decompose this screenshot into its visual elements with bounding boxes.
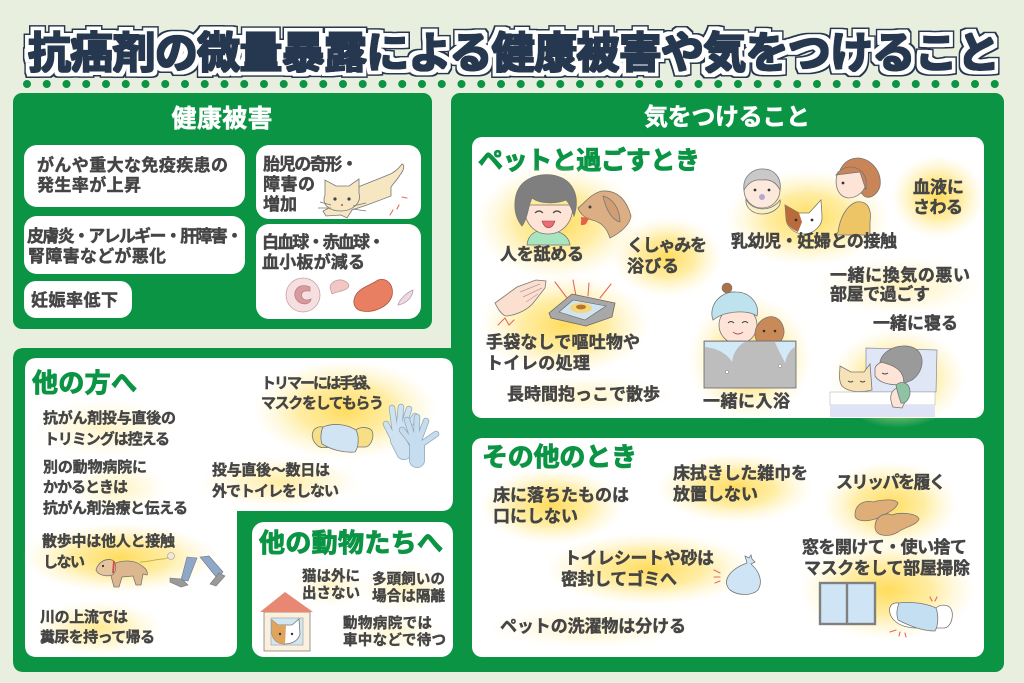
card: 胎児の奇形: 胎児の奇形・ (263, 155, 358, 174)
item: 長時間抱っこ (493, 375, 677, 415)
card: 妊娠率低下 (24, 281, 132, 318)
card: 胎児の奇形: 障害の (263, 174, 315, 194)
icon: baby, cat, pregnant woman (744, 158, 880, 235)
panel: 健康被害 (13, 93, 432, 329)
item: 手袋なしで処理 (480, 275, 650, 375)
heading: 健康被害: 健康被害 (172, 105, 272, 133)
heading: 他の動物たちへ: 他の動物たちへ (259, 528, 443, 558)
item: 猫は外に出さない (292, 564, 368, 608)
panel: 他の動物たちへ (252, 522, 453, 657)
card: 胎児の奇形 (256, 145, 421, 219)
item: 手袋なしで処理: トイレの処理 (486, 354, 590, 373)
item: 窓を開けてマスク: マスクをして部屋掃除 (804, 559, 970, 578)
item: ペットの洗濯物: ペットの洗濯物は分ける (500, 617, 686, 636)
item: 猫は外に出さない: 猫は外に (302, 567, 360, 585)
panel: 気をつけること (451, 93, 1004, 672)
icon: blood cells (286, 278, 413, 312)
item: 多頭飼い: 多頭飼いの (372, 570, 445, 588)
panel: その他のとき (472, 438, 984, 657)
item: 投与直後〜数日 (198, 456, 362, 508)
card: がんや重大な免疫疾患 (24, 145, 245, 207)
item: 換気の悪い部屋 (815, 256, 985, 316)
item: ペットの洗濯物 (485, 605, 695, 649)
card: 皮膚炎など: 腎障害などが悪化 (28, 246, 166, 266)
item: 乳幼児・妊婦 (726, 158, 897, 266)
item: 乳幼児・妊婦: 乳幼児・妊婦との接触 (731, 232, 897, 251)
item: トイレシートや砂: 密封してゴミへ (561, 569, 677, 589)
card: 血球: 血小板が減る (262, 252, 365, 272)
item: 投与直後〜数日: 外でトイレをしない (212, 482, 339, 500)
item: 血液にさわる: さわる (913, 198, 963, 217)
item: 人を舐める (476, 164, 640, 280)
icon: bathing person and dog (704, 283, 796, 388)
item: 一緒に入浴: 一緒に入浴 (703, 392, 790, 411)
card: 皮膚炎など: 皮膚炎・アレルギー・肝障害・ (27, 226, 243, 246)
item: 換気の悪い部屋: 一緒に換気の悪い (830, 266, 970, 285)
item: くしゃみを浴びる: くしゃみを (627, 236, 707, 255)
item: 抗がん剤投与直後 (33, 398, 177, 458)
card: がんや重大な免疫疾患: 発生率が上昇 (37, 175, 141, 195)
icon: gloves (386, 407, 436, 460)
item: 一緒に寝る (830, 314, 966, 428)
item: 散歩中: しない (43, 554, 85, 571)
item: トリマー: マスクをしてもらう (261, 395, 384, 412)
item: 床拭きした雑巾: 放置しない (673, 485, 758, 504)
item: 換気の悪い部屋: 部屋で過ごす (830, 284, 930, 304)
item: トリマー: トリマーには手袋、 (261, 374, 380, 392)
item: 床に落ちたもの (480, 468, 629, 544)
item: 手袋なしで処理: 手袋なしで嘔吐物や (486, 332, 640, 352)
heading: ペットと過ごすとき: ペットと過ごすとき (478, 146, 700, 175)
item: 床に落ちたもの: 床に落ちたものは (493, 486, 629, 505)
item: 多頭飼い: 場合は隔離 (372, 587, 446, 605)
item: 別の動物病院: 別の動物病院に (43, 458, 147, 476)
item: 動物病院では (337, 610, 447, 654)
item: 人を舐める: 人を舐める (500, 245, 584, 264)
item: 一緒に寝る: 一緒に寝る (873, 314, 958, 333)
item: くしゃみを浴びる (612, 217, 722, 297)
item: 床拭きした雑巾: 床拭きした雑巾を (673, 464, 808, 483)
item: くしゃみを浴びる: 浴びる (627, 257, 679, 276)
item: 窓を開けてマスク (800, 538, 976, 640)
item: 川の上流 (33, 600, 163, 656)
item: 猫は外に出さない: 出さない (302, 585, 360, 602)
icon: sealed garbage bag (714, 555, 760, 594)
icon: window (820, 583, 875, 624)
item: 散歩中 (22, 523, 225, 593)
item: 動物病院では: 車中などで待つ (343, 632, 446, 649)
icon: sleeping person and cat (830, 346, 937, 417)
icon: cat (318, 164, 407, 218)
item: 床に落ちたもの: 口にしない (493, 507, 578, 526)
item: 抗がん剤投与直後: 抗がん剤投与直後の (43, 409, 176, 427)
item: スリッパを履く: スリッパを履く (836, 473, 946, 492)
icon: mask (312, 424, 373, 452)
item: 床拭きした雑巾 (657, 453, 813, 523)
panel: ペットと過ごすとき (472, 137, 985, 428)
card: 皮膚炎など (24, 216, 245, 274)
item: 抗がん剤投与直後: トリミングは控える (44, 430, 170, 448)
item: 窓を開けてマスク: 窓を開けて・使い捨て (802, 538, 967, 557)
item: 川の上流: 糞尿を持って帰る (40, 628, 155, 646)
item: スリッパを履く (822, 461, 958, 549)
item: 別の動物病院: かかるときは (43, 479, 128, 496)
panel: 他の方へ (13, 348, 463, 672)
heading: その他のとき: その他のとき (482, 442, 637, 472)
icon: slippers (855, 500, 919, 535)
item: トリマー (253, 360, 437, 460)
heading: 気をつけること: 気をつけること (644, 104, 810, 131)
item: 別の動物病院 (43, 458, 188, 517)
item: 別の動物病院: 抗がん剤治療と伝える (43, 499, 188, 517)
icon: mask (890, 597, 952, 637)
icon: dog on leash and walker legs (96, 552, 225, 587)
card: 胎児の奇形: 増加 (263, 194, 297, 214)
icon: cat in house (260, 592, 313, 651)
item: 血液にさわる (891, 155, 985, 239)
item: 多頭飼い (360, 564, 450, 612)
item: 血液にさわる: 血液に (913, 178, 964, 197)
item: 川の上流: 川の上流では (40, 609, 128, 626)
card: 血球: 白血球・赤血球・ (262, 233, 385, 252)
heading: 他の方へ: 他の方へ (32, 368, 137, 398)
item: トイレシートや砂: トイレシートや砂は (564, 549, 714, 568)
card: 血球 (256, 224, 421, 319)
item: 長時間抱っこ: 長時間抱っこで散歩 (507, 384, 660, 404)
title: 抗癌剤の微量暴露による健康被害や気をつけること (28, 30, 1000, 78)
item: 一緒に入浴 (688, 283, 812, 420)
icon: hand and litter tray (495, 280, 615, 326)
card: がんや重大な免疫疾患: がんや重大な免疫疾患の (37, 155, 228, 175)
item: トイレシートや砂 (545, 533, 760, 605)
item: 動物病院では: 動物病院では (343, 614, 432, 632)
card: 妊娠率低下: 妊娠率低下 (31, 291, 118, 310)
item: 投与直後〜数日: 投与直後〜数日は (212, 461, 330, 479)
icon: kid and dog (515, 175, 631, 245)
item: 散歩中: 散歩中は他人と接触 (42, 532, 175, 550)
